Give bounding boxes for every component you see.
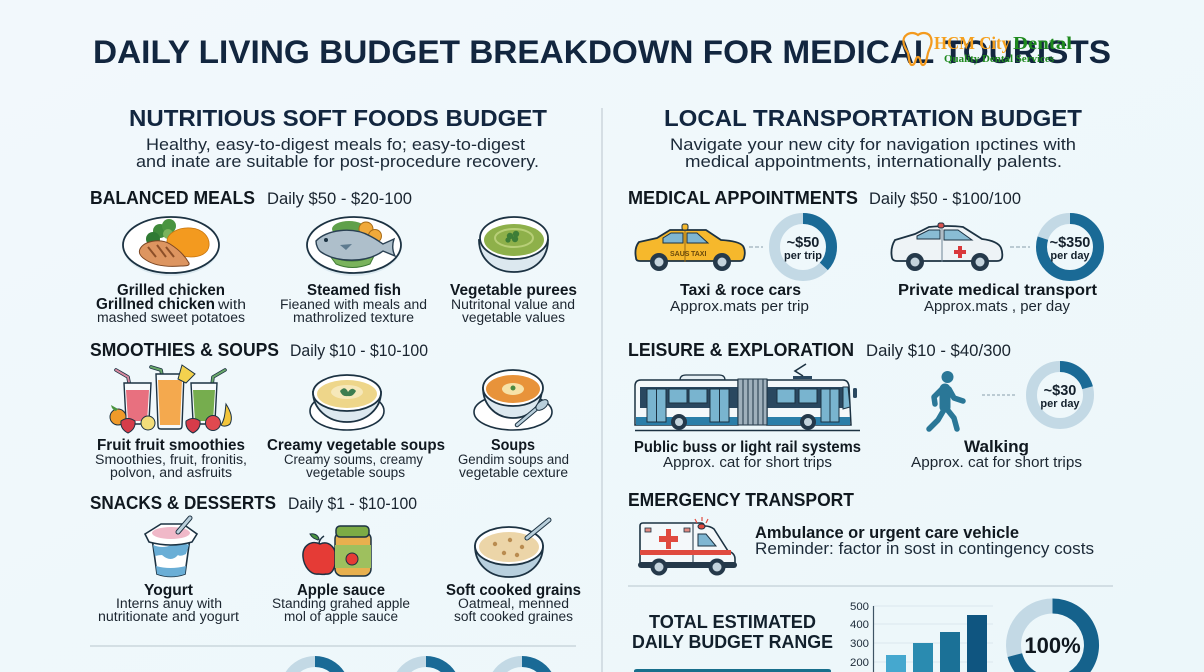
heading: transportation budget: LOCAL TRANSPORTATION BUDGET bbox=[664, 105, 1082, 131]
text: grilled chicken bbox=[96, 282, 246, 325]
text: vegetable purees: vegetable values bbox=[462, 310, 565, 325]
text: apple sauce: Standing grahed apple bbox=[272, 596, 410, 611]
bar chart: budget bbox=[850, 601, 993, 672]
icon: soft cooked grains bowl bbox=[475, 520, 549, 577]
text: ambulance: Reminder: factor in sost in contingency costs bbox=[755, 540, 1094, 558]
intro text: transportation: medical appointments, internationally palents. bbox=[685, 153, 1062, 171]
divider: column separator bbox=[601, 108, 603, 672]
panel: nutritious soft foods budget bbox=[90, 105, 581, 624]
donut: taxi cost: per trip bbox=[784, 250, 822, 262]
panel: local transportation budget bbox=[628, 105, 1098, 576]
icon: soup with spoon bbox=[474, 370, 552, 430]
title: DAILY LIVING BUDGET BREAKDOWN FOR MEDICAL TOURISTS bbox=[93, 34, 1111, 70]
text: yogurt bbox=[98, 582, 239, 624]
section heading: medical appointments bbox=[628, 188, 1021, 208]
logo: HCM City Dental watermark: HCM City bbox=[934, 33, 1010, 53]
section heading: smoothies and soups: SMOOTHIES & SOUPS bbox=[90, 340, 279, 360]
text: creamy vegetable soups: Creamy vegetable soups bbox=[267, 437, 445, 454]
text: soft cooked grains bbox=[446, 582, 581, 624]
heading: total estimated daily budget range: DAILY BUDGET RANGE bbox=[632, 632, 833, 652]
logo: HCM City Dental watermark: Quality Dental Services bbox=[944, 54, 1054, 65]
donut: private transport cost: per day bbox=[1050, 250, 1090, 262]
text: soups bbox=[458, 437, 569, 480]
section heading: emergency transport: EMERGENCY TRANSPORT bbox=[628, 490, 854, 510]
icon: steamed fish plate bbox=[307, 217, 401, 276]
intro text: foods: Healthy, easy-to-digest meals fo; easy-to-digest bbox=[146, 136, 525, 154]
logo: HCM City Dental watermark bbox=[903, 33, 1072, 65]
bar chart: budget: 400 bbox=[850, 619, 869, 631]
text: vegetable purees: Vegetable purees bbox=[450, 282, 577, 299]
text: apple sauce bbox=[272, 582, 410, 624]
text: private medical transport bbox=[898, 282, 1097, 315]
section heading: smoothies and soups bbox=[90, 340, 428, 360]
text: ambulance: Ambulance or urgent care vehicle bbox=[755, 523, 1019, 542]
text: steamed fish: Fieaned with meals and bbox=[280, 297, 427, 312]
donut: food summary 3 bbox=[493, 656, 551, 672]
connector: taxi to donut bbox=[749, 246, 763, 248]
donut: private transport cost: ~$350 bbox=[1050, 235, 1090, 251]
divider: right footer rule bbox=[628, 585, 1113, 587]
heading: total estimated daily budget range bbox=[632, 612, 833, 652]
section heading: balanced meals: Daily $50 - $20-100 bbox=[267, 190, 412, 208]
text: taxi bbox=[670, 282, 809, 315]
icon: private medical car bbox=[891, 223, 1002, 271]
text: fruit smoothies: Fruit fruit smoothies bbox=[97, 437, 245, 454]
donut: walking cost bbox=[1032, 366, 1088, 424]
connector: car to donut bbox=[1010, 246, 1030, 248]
text: steamed fish: Steamed fish bbox=[307, 282, 401, 299]
bar chart: budget: 200 bbox=[850, 657, 869, 669]
text: fruit smoothies: Smoothies, fruit, fronitis, bbox=[95, 452, 247, 467]
icon: vegetable puree bowl bbox=[479, 217, 548, 272]
total range banner bbox=[634, 669, 831, 672]
text: yogurt: Interns anuy with bbox=[116, 596, 222, 611]
text: steamed fish bbox=[280, 282, 427, 325]
heading: total estimated daily budget range: TOTAL ESTIMATED bbox=[649, 612, 816, 632]
text: steamed fish: mathrolized texture bbox=[293, 310, 414, 325]
text: taxi: Taxi & roce cars bbox=[680, 282, 801, 299]
text: public bus: Public buss or light rail systems bbox=[634, 439, 861, 456]
section heading: balanced meals: BALANCED MEALS bbox=[90, 188, 255, 208]
text: private medical transport: Private medical transport bbox=[898, 282, 1097, 299]
icon: articulated bus bbox=[635, 364, 860, 430]
text: soups: Soups bbox=[491, 437, 535, 454]
text: yogurt: nutritionate and yogurt bbox=[98, 609, 239, 624]
text: private medical transport: Approx.mats , per day bbox=[924, 298, 1070, 315]
text: creamy vegetable soups: vegetable soups bbox=[306, 465, 405, 480]
icon: creamy vegetable soup bbox=[310, 375, 384, 430]
donut: taxi cost: ~$50 bbox=[787, 235, 819, 251]
text: creamy vegetable soups: Creamy soums, creamy bbox=[284, 452, 423, 467]
section heading: balanced meals bbox=[90, 188, 412, 208]
donut: walking cost: per day bbox=[1040, 398, 1080, 410]
text: fruit smoothies: polvon, and asfruits bbox=[110, 465, 232, 480]
text: ambulance bbox=[755, 523, 1094, 558]
text: soft cooked grains: soft cooked graines bbox=[454, 609, 573, 624]
text: walking bbox=[911, 437, 1082, 471]
text: walking: Walking bbox=[964, 437, 1029, 456]
donut: taxi cost bbox=[774, 218, 832, 276]
section heading: smoothies and soups: Daily $10 - $10-100 bbox=[290, 342, 428, 360]
logo: HCM City Dental watermark: Dental bbox=[1013, 33, 1072, 53]
section heading: leisure and exploration bbox=[628, 340, 1011, 360]
text: soft cooked grains: Oatmeal, menned bbox=[458, 596, 569, 611]
icon: grilled chicken plate bbox=[123, 217, 219, 276]
text: public bus bbox=[634, 439, 861, 471]
text: apple sauce: mol of apple sauce bbox=[284, 609, 398, 624]
section heading: medical appointments: Daily $50 - $100/100 bbox=[869, 190, 1021, 208]
donut: food summary 1 bbox=[286, 656, 344, 672]
text: grilled chicken: mashed sweet potatoes bbox=[97, 310, 245, 325]
divider: left footer rule bbox=[90, 645, 576, 647]
section heading: leisure and exploration: LEISURE & EXPLORATION bbox=[628, 340, 854, 360]
donut: walking cost: ~$30 bbox=[1044, 383, 1076, 399]
icon: taxi bbox=[635, 224, 745, 271]
heading: foods budget: NUTRITIOUS SOFT FOODS BUDGET bbox=[129, 105, 547, 131]
bar chart: budget: 500 bbox=[850, 601, 869, 613]
icon: fruit smoothies bbox=[110, 365, 231, 433]
text: fruit smoothies bbox=[95, 437, 247, 480]
text: creamy vegetable soups bbox=[267, 437, 445, 480]
intro text: foods: and inate are suitable for post-procedure recovery. bbox=[136, 153, 539, 171]
section heading: medical appointments: MEDICAL APPOINTMENTS bbox=[628, 188, 858, 208]
donut: private transport cost bbox=[1042, 218, 1098, 276]
text: soft cooked grains: Soft cooked grains bbox=[446, 582, 581, 599]
section heading: snacks and desserts: Daily $1 - $10-100 bbox=[288, 495, 417, 513]
section heading: snacks and desserts bbox=[90, 493, 417, 513]
text: yogurt: Yogurt bbox=[144, 582, 193, 599]
bar chart: budget: 300 bbox=[850, 638, 869, 650]
icon: taxi: TAXI bbox=[691, 251, 706, 258]
connector: walking to donut bbox=[982, 394, 1015, 396]
intro text: transportation: Navigate your new city for navigation ıpctines with bbox=[670, 136, 1076, 154]
icon: apple sauce jar bbox=[303, 526, 371, 576]
text: soups: vegetable cexture bbox=[459, 465, 568, 480]
text: taxi: Approx.mats per trip bbox=[670, 298, 809, 315]
icon: yogurt cup bbox=[145, 518, 197, 576]
section heading: snacks and desserts: SNACKS & DESSERTS bbox=[90, 493, 276, 513]
text: vegetable purees: Nutritonal value and bbox=[451, 297, 575, 312]
text: soups: Gendim soups and bbox=[458, 452, 569, 467]
icon: taxi: SAUS bbox=[670, 251, 690, 258]
intro text: foods bbox=[136, 136, 539, 171]
section heading: leisure and exploration: Daily $10 - $40/300 bbox=[866, 342, 1011, 360]
text: grilled chicken: Grilled chicken bbox=[117, 282, 225, 299]
icon: walking person bbox=[929, 371, 963, 429]
donut: food summary 2 bbox=[397, 656, 455, 672]
text: grilled chicken: Grillned chicken bbox=[96, 296, 215, 313]
intro text: transportation bbox=[670, 136, 1076, 171]
icon: ambulance bbox=[638, 517, 737, 576]
text: grilled chicken: with bbox=[217, 297, 246, 312]
text: apple sauce: Apple sauce bbox=[297, 582, 385, 599]
text: vegetable purees bbox=[450, 282, 577, 325]
donut: total 100% bbox=[1006, 598, 1099, 672]
text: public bus: Approx. cat for short trips bbox=[663, 454, 832, 471]
donut: total 100%: 100% bbox=[1024, 633, 1081, 658]
text: walking: Approx. cat for short trips bbox=[911, 454, 1082, 471]
